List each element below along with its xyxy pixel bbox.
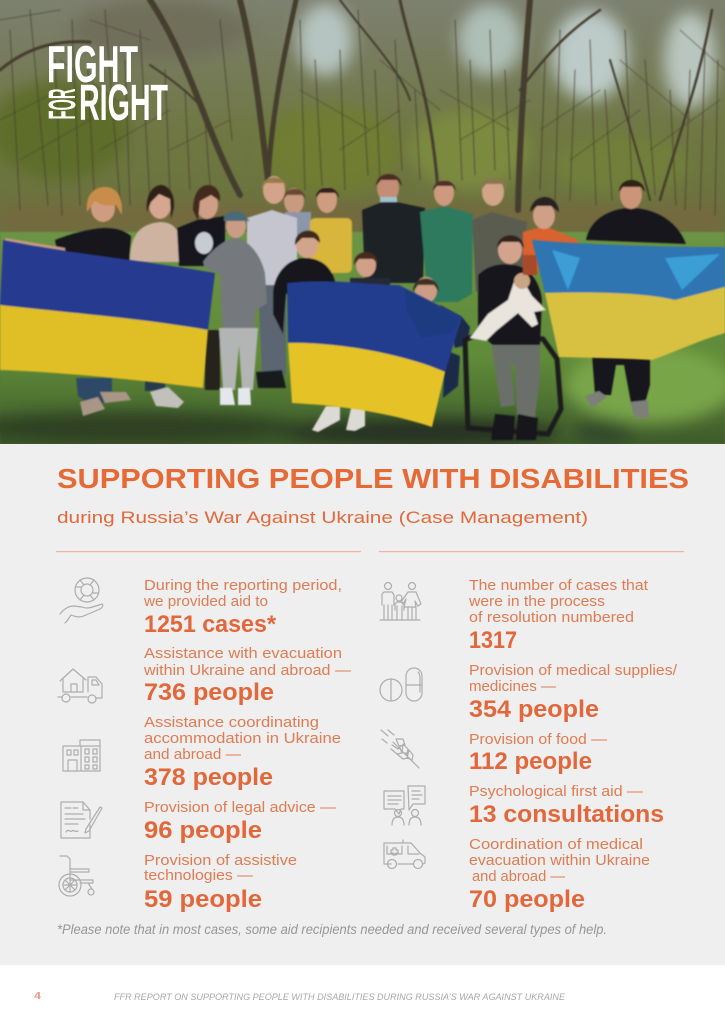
- people: [5, 174, 686, 440]
- dog: [470, 282, 546, 341]
- stat: food: 112 people: [469, 748, 592, 775]
- stat: medical supplies: medicines —: [469, 679, 557, 695]
- icon: document and pen: [61, 802, 102, 838]
- logo: Fight for Right: FIGHT: [47, 36, 138, 94]
- panel: content background: [0, 444, 725, 965]
- stat: medical supplies: Provision of medical supplies/: [469, 663, 678, 679]
- stat: evacuation: Assistance with evacuation: [144, 646, 342, 662]
- icon: pills: [380, 668, 422, 701]
- stat: food: [469, 732, 608, 775]
- tree trunks and branches: [0, 0, 725, 215]
- women on the left: [55, 228, 131, 266]
- stat: assistive technologies: technologies —: [144, 868, 254, 884]
- stat: medical evacuation: [469, 837, 650, 913]
- icon: wheat: [381, 730, 419, 768]
- back row: [284, 188, 304, 214]
- seated: [356, 253, 376, 277]
- icon: apartment building: [63, 740, 100, 771]
- stat: assistive technologies: [144, 853, 297, 913]
- stat: 1317 cases: [468, 578, 648, 654]
- stat: accommodation: [144, 715, 341, 791]
- stat: medical evacuation: 70 people: [469, 886, 585, 913]
- icon: family: [380, 582, 421, 620]
- flags: [0, 240, 725, 427]
- icon: hand holding lifebuoy: [60, 578, 103, 623]
- flag: left: [0, 240, 215, 388]
- stat: legal advice: Provision of legal advice —: [144, 800, 337, 816]
- logo: Fight for Right: [42, 36, 168, 131]
- title: SUPPORTING PEOPLE WITH DISABILITIES: [57, 463, 689, 494]
- flag: right: [532, 240, 725, 360]
- stat: assistive technologies: Provision of assistive: [144, 853, 297, 869]
- stat: medical evacuation: and abroad —: [472, 869, 565, 885]
- subtitle: during Russia’s War Against Ukraine (Case Management): [57, 508, 588, 527]
- page number: 4: [34, 991, 42, 1002]
- stat: accommodation: accommodation in Ukraine: [144, 731, 341, 747]
- stat: medical evacuation: evacuation within Ukraine: [469, 853, 650, 869]
- stat: 1251 cases: [143, 578, 342, 638]
- footnote: *Please note that in most cases, some aid recipients needed and received several types of help.: [57, 922, 607, 937]
- girl in black hoodie: [273, 258, 336, 334]
- icon: wheelchair: [59, 856, 94, 896]
- logo: Fight for Right: RIGHT: [79, 74, 168, 131]
- stat: 1251 cases: During the reporting period,: [144, 578, 342, 594]
- sky and foliage patches: [0, 0, 725, 231]
- stat: evacuation: within Ukraine and abroad —: [143, 663, 352, 679]
- legs: [76, 378, 112, 404]
- stat: medical evacuation: Coordination of medical: [469, 837, 643, 853]
- stat: 1317 cases: of resolution numbered: [469, 610, 634, 626]
- logo: Fight for Right: FOR: [42, 88, 84, 120]
- stat: evacuation: [143, 646, 352, 706]
- stat: food: Provision of food —: [469, 732, 608, 748]
- stat: psychological first aid: [469, 784, 664, 828]
- stat: medical supplies: [469, 663, 678, 723]
- flag: middle: [287, 281, 462, 427]
- photo: group with Ukrainian flags outdoors: [0, 0, 725, 446]
- stat: accommodation: 378 people: [144, 764, 273, 791]
- stat: legal advice: 96 people: [144, 817, 262, 844]
- stat: 1317 cases: 1317: [469, 627, 517, 654]
- stat: psychological first aid: Psychological first aid —: [469, 784, 644, 800]
- icon: people with speech bubbles: [384, 786, 425, 825]
- stat: 1251 cases: 1251 cases*: [144, 611, 277, 638]
- man in wheelchair: [465, 333, 561, 434]
- stat: legal advice: [144, 800, 337, 844]
- stat: 1251 cases: we provided aid to: [143, 594, 268, 610]
- stat: psychological first aid: 13 consultations: [469, 801, 664, 828]
- grass: [0, 232, 725, 444]
- icon: house on truck: [58, 669, 102, 703]
- stat: accommodation: Assistance coordinating: [144, 715, 319, 731]
- stat: 1317 cases: were in the process: [468, 594, 605, 610]
- boy with cap: [203, 238, 267, 329]
- stat: accommodation: and abroad —: [144, 747, 242, 763]
- icon: ambulance: [384, 840, 425, 868]
- footer text: FFR REPORT ON SUPPORTING PEOPLE WITH DISABILITIES DURING RUSSIA’S WAR AGAINST UKRAINE: [114, 992, 566, 1003]
- stat: medical supplies: 354 people: [469, 696, 599, 723]
- stat: 1317 cases: The number of cases that: [469, 578, 648, 594]
- stat: assistive technologies: 59 people: [144, 886, 262, 913]
- stat: evacuation: 736 people: [144, 679, 274, 706]
